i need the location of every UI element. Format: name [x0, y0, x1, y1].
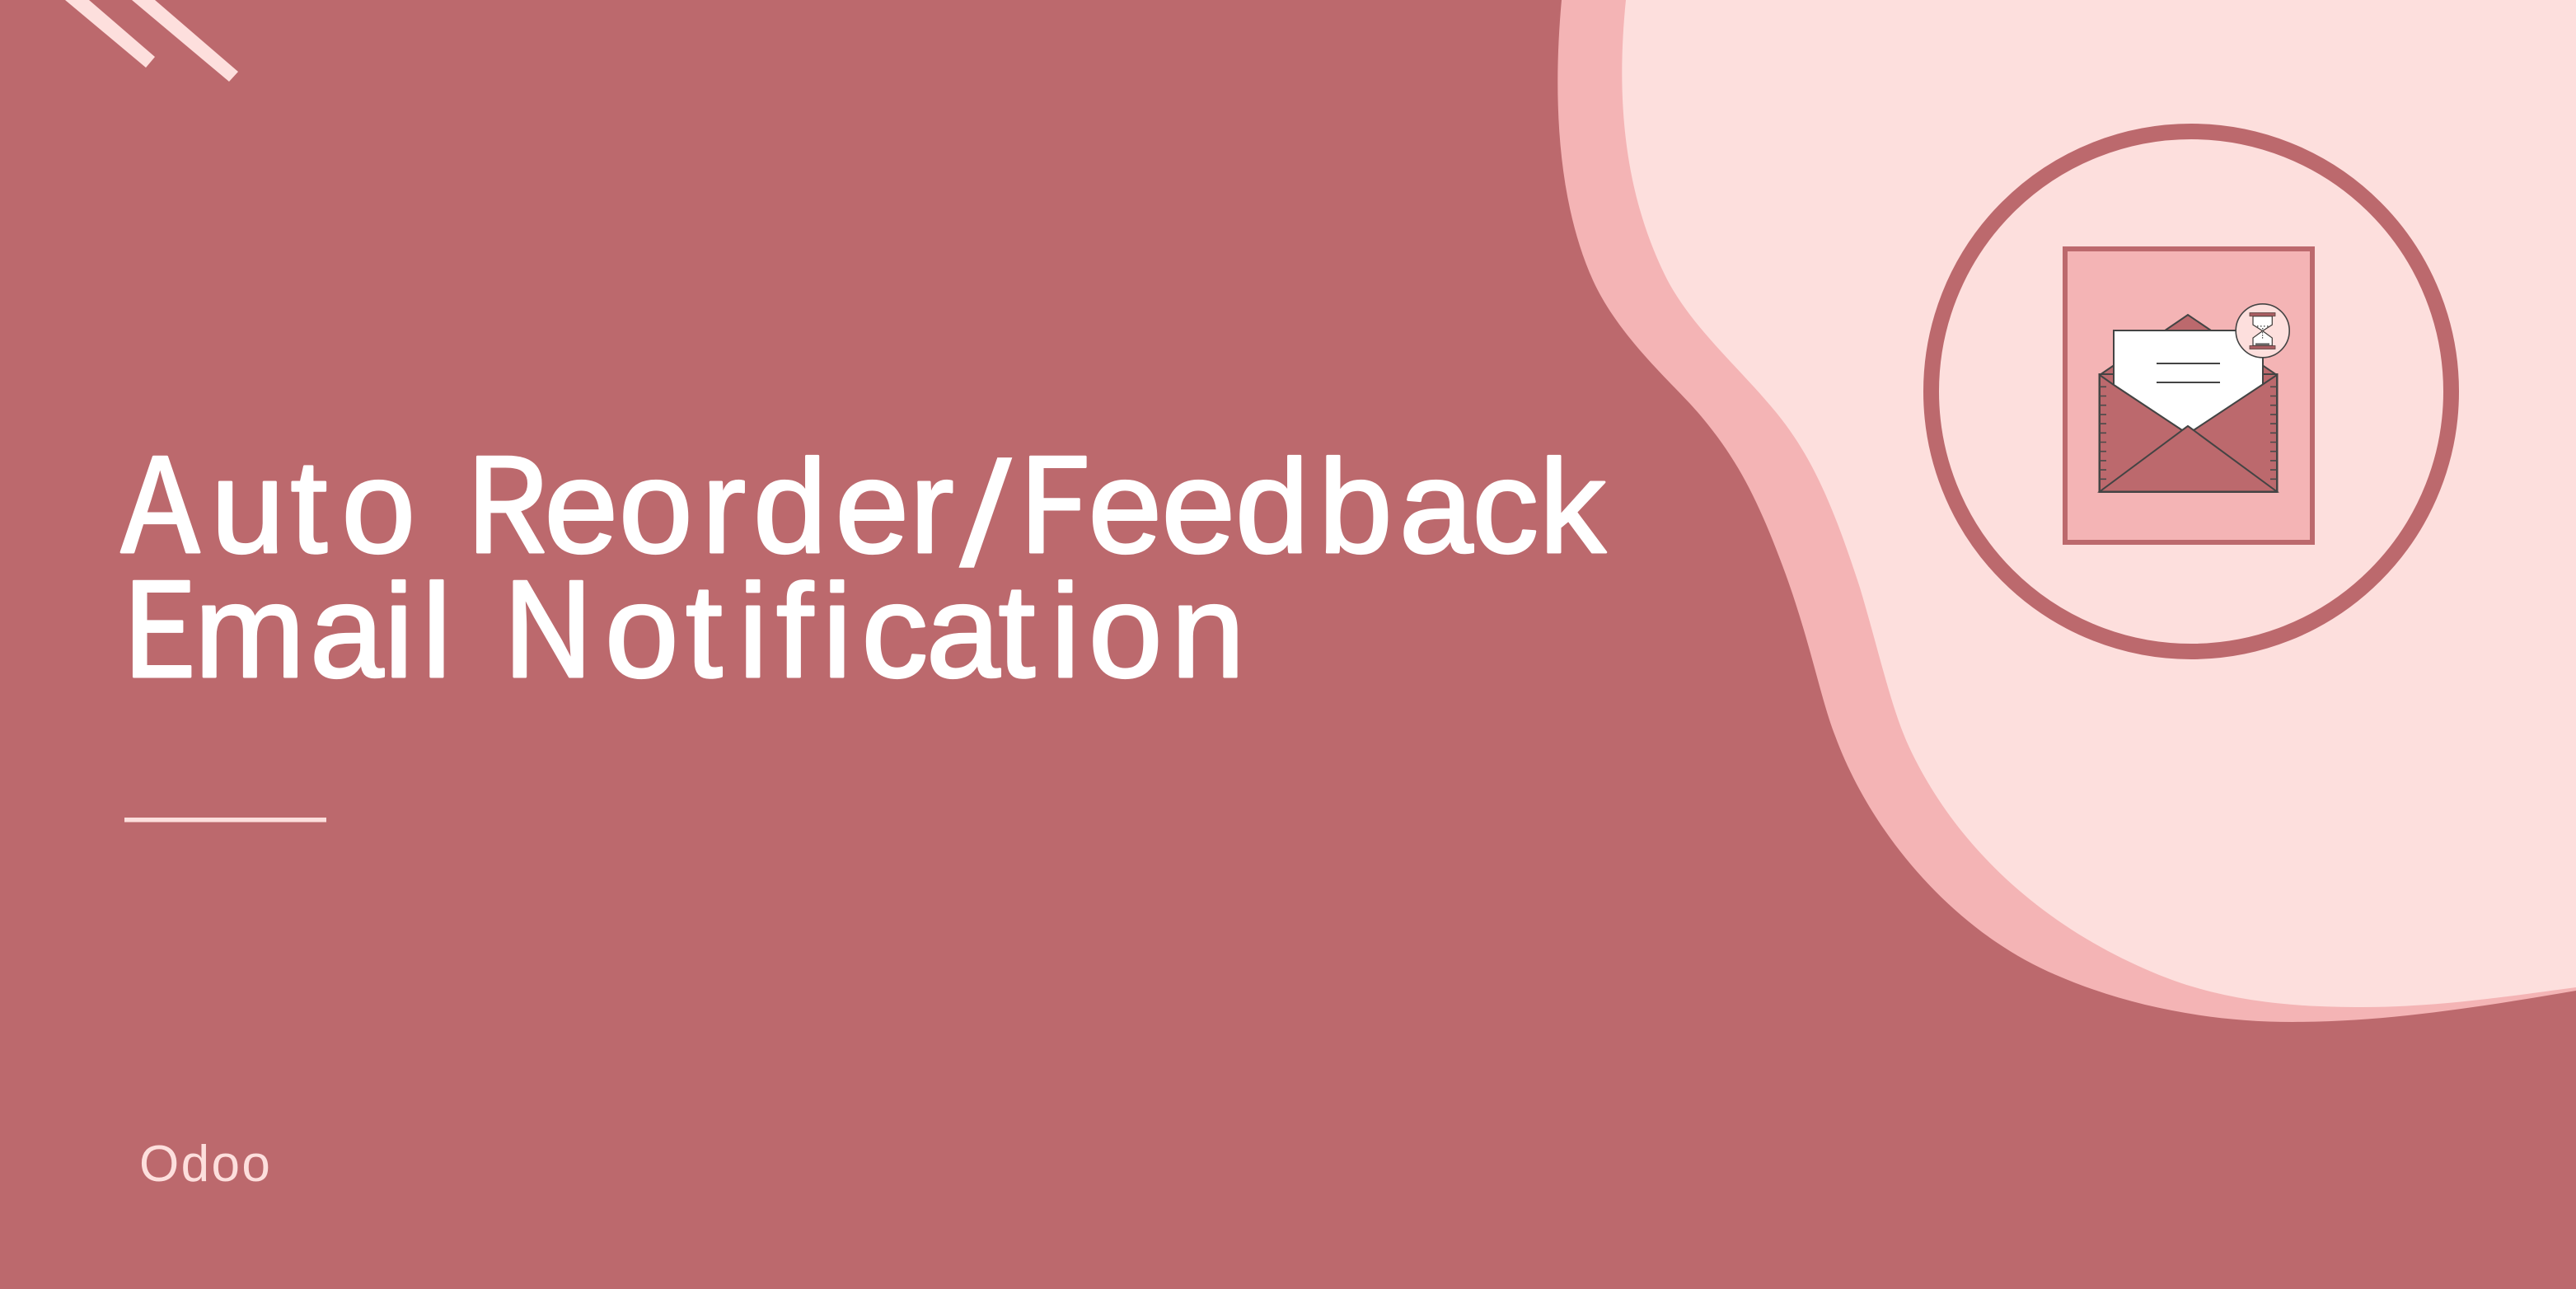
envelope right flap — [2188, 375, 2277, 491]
title line 2: E — [120, 526, 198, 715]
envelope back flap — [2100, 315, 2277, 491]
icon: hourglass badge — [2236, 304, 2289, 358]
hourglass sand — [2255, 326, 2269, 345]
badge disc — [2236, 304, 2289, 358]
title line 1 — [120, 401, 1606, 598]
icon card — [2065, 249, 2312, 542]
medallion ring — [1932, 132, 2451, 651]
title line 1: R — [465, 401, 547, 590]
title line 2: otification — [605, 557, 1245, 705]
icon: open envelope with letter — [2100, 315, 2278, 492]
title — [120, 401, 1606, 715]
title line 1: eedback — [1088, 433, 1606, 581]
title line 1: A — [120, 401, 200, 590]
title line 1: F — [1017, 401, 1089, 590]
envelope front flap — [2100, 426, 2277, 491]
title line 2: N — [501, 526, 595, 715]
wave: light pink panel — [1622, 0, 2576, 1007]
letter text lines — [2157, 363, 2220, 382]
icon medallion — [1932, 132, 2451, 651]
title line 1: eorder — [544, 433, 954, 581]
envelope outline — [2100, 374, 2278, 492]
envelope left flap — [2100, 375, 2188, 491]
letter — [2114, 330, 2263, 430]
envelope stitching ticks — [2100, 387, 2277, 479]
title line 2: mail — [194, 557, 532, 705]
title line 1: / — [959, 432, 1013, 598]
title line 1: uto — [211, 433, 449, 581]
hourglass glass — [2253, 316, 2272, 345]
brand label: Odoo — [139, 1136, 272, 1193]
hourglass caps — [2250, 313, 2275, 349]
decorative diagonal stripes — [65, 0, 238, 82]
wave: mid pink band — [1557, 0, 2576, 1022]
title underline — [124, 818, 326, 823]
